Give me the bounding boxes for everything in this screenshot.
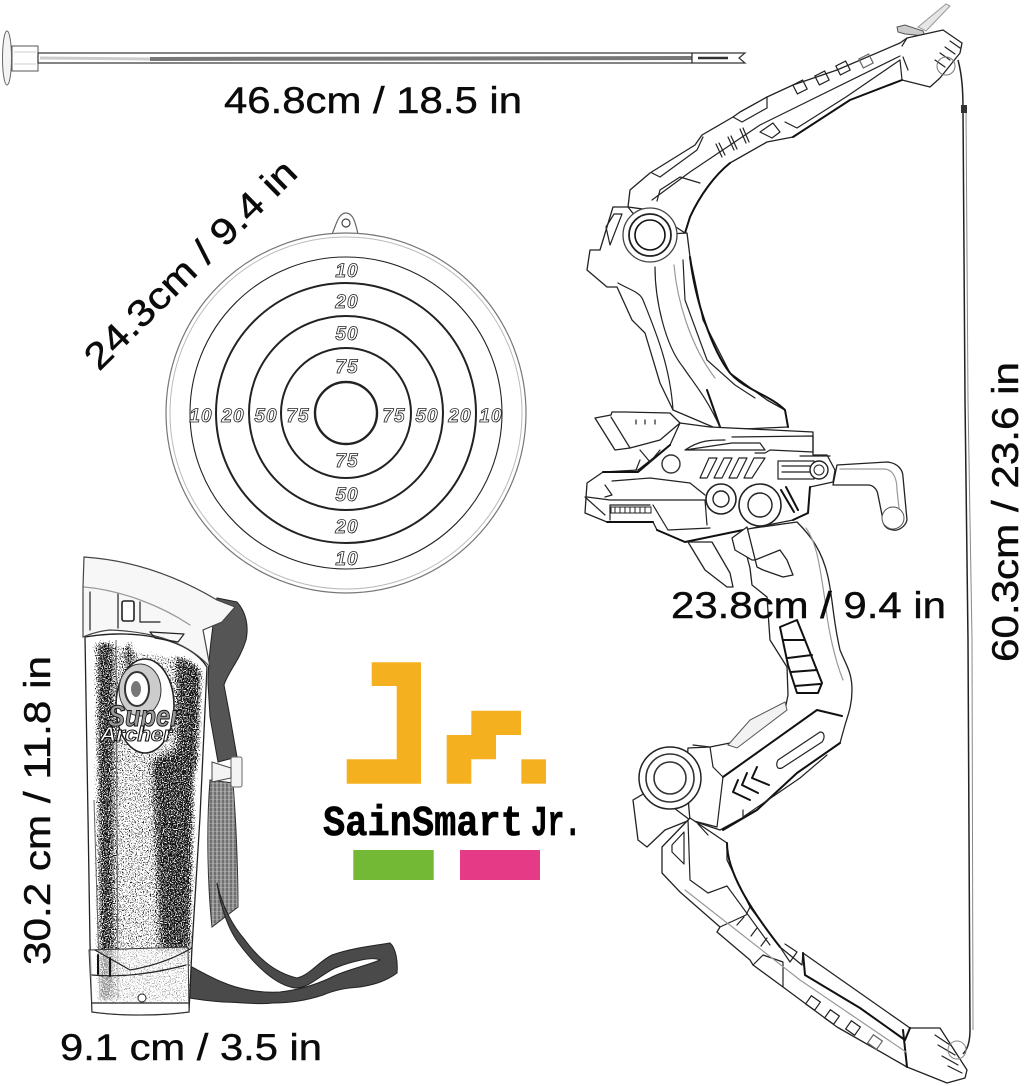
lower limb <box>662 818 967 1083</box>
target scores: 20 <box>220 406 245 427</box>
target scores <box>189 261 503 570</box>
grip chevrons <box>733 767 769 800</box>
target scores: 75 <box>335 451 359 472</box>
target length label: 24.3cm / 9.4 in <box>76 152 305 378</box>
quiver badge: Archer <box>99 724 173 746</box>
upper hub plate <box>587 207 788 430</box>
lower hub <box>633 747 701 847</box>
upper limb square notches <box>793 54 873 94</box>
logo dot <box>521 759 546 784</box>
grip ruler <box>728 702 787 748</box>
target scores: 75 <box>382 406 406 427</box>
target scores: 20 <box>334 517 359 538</box>
quiver body <box>85 634 207 1015</box>
round target <box>166 213 526 593</box>
arrow <box>2 31 745 85</box>
suction cup <box>2 31 38 85</box>
target scores: 75 <box>335 357 359 378</box>
target hanger loop <box>332 213 358 234</box>
logo wordmark: Jr. <box>531 800 581 848</box>
quiver strap <box>183 598 397 1004</box>
logo letter r <box>447 711 521 784</box>
target rings <box>166 233 526 593</box>
quiver badge: Super <box>108 700 182 733</box>
target scores: 10 <box>335 261 359 282</box>
target scores: 20 <box>334 292 359 313</box>
quiver height label: 30.2 cm / 11.8 in <box>17 656 58 965</box>
grip ladder <box>780 620 822 693</box>
arrow nock <box>692 53 745 63</box>
target scores: 10 <box>479 406 503 427</box>
quiver width label: 9.1 cm / 3.5 in <box>60 1027 322 1068</box>
strap buckle <box>212 757 242 787</box>
bow limb width label: 23.8cm / 9.4 in <box>671 585 946 626</box>
SainSmart Jr. logo <box>323 662 581 880</box>
finger guard <box>688 542 733 587</box>
extension handle <box>833 462 907 530</box>
rear sight <box>595 412 680 470</box>
bow string <box>958 60 973 1054</box>
target scores: 50 <box>335 485 359 506</box>
logo green bar <box>353 850 434 880</box>
quiver <box>83 557 397 1015</box>
target scores: 50 <box>335 324 359 345</box>
logo wordmark: SainSmart <box>323 800 523 848</box>
target scores: 10 <box>335 549 359 570</box>
target scores: 50 <box>415 406 439 427</box>
target scores: 20 <box>447 406 472 427</box>
bow grip <box>687 522 852 830</box>
target scores: 75 <box>286 406 310 427</box>
quiver cap <box>83 557 235 667</box>
trigger <box>732 527 793 577</box>
logo letter J <box>347 662 421 784</box>
arrow length label: 46.8cm / 18.5 in <box>224 80 522 121</box>
string clip <box>897 4 950 36</box>
target scores: 50 <box>254 406 278 427</box>
bow riser <box>585 423 835 542</box>
upper limb <box>628 30 962 233</box>
bow <box>585 4 973 1083</box>
arrow shaft <box>38 53 692 63</box>
quiver badge <box>99 659 182 753</box>
logo pink bar <box>460 850 540 880</box>
quiver foot band <box>89 947 192 1015</box>
lower limb square notches <box>806 996 882 1049</box>
upper hub <box>623 208 677 262</box>
target scores: 10 <box>189 406 213 427</box>
